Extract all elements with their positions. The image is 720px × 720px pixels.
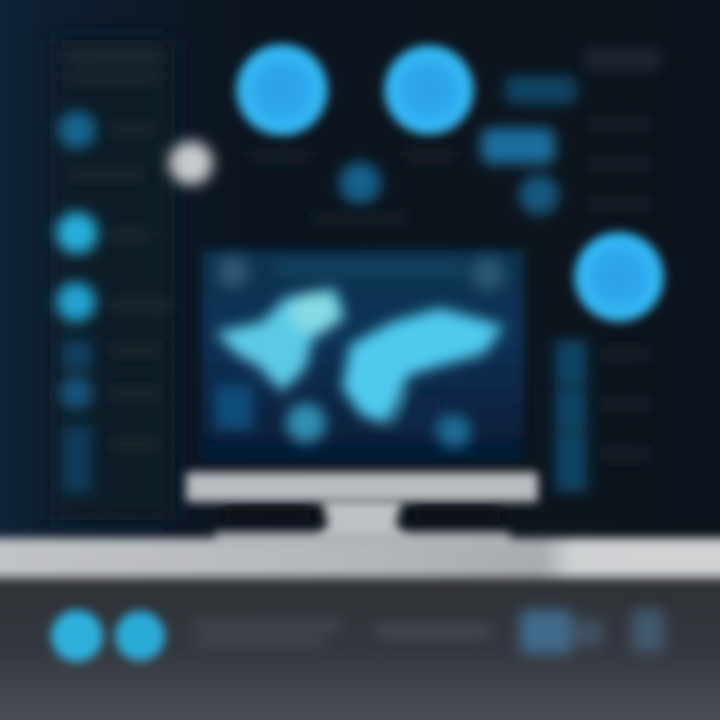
left panel bbox=[50, 40, 175, 520]
icon: dim bar one bbox=[62, 340, 92, 370]
map: light highlight bbox=[290, 292, 338, 332]
right column blue bars bbox=[555, 340, 587, 492]
icon: large blue orb right bbox=[574, 232, 664, 322]
world map bbox=[215, 288, 504, 448]
desk shelf bbox=[0, 532, 720, 578]
stand shadows bbox=[225, 508, 500, 522]
map: east landmass bbox=[342, 308, 504, 424]
map: small island bottom bbox=[286, 403, 326, 443]
bottom text placeholders bbox=[195, 620, 490, 646]
map: dim block left bbox=[215, 385, 253, 430]
monitor bezel bbox=[186, 472, 538, 502]
screen header items bbox=[217, 256, 505, 291]
bottom left icons bbox=[51, 610, 165, 662]
map: small island right bbox=[437, 414, 471, 448]
icon: small centre dot bbox=[339, 162, 381, 204]
icon: large blue orb left bbox=[236, 44, 328, 136]
right panel text placeholders bbox=[585, 48, 660, 458]
monitor screen bbox=[202, 250, 524, 462]
top right blue tags bbox=[481, 76, 577, 215]
icon: white dot bbox=[169, 141, 213, 185]
map: dim block centre bbox=[400, 395, 440, 430]
icon: cyan dot two bbox=[56, 282, 96, 322]
icon: large blue orb centre bbox=[384, 45, 474, 135]
icon: dim bar two bbox=[62, 425, 92, 493]
icon: cyan dot one bbox=[56, 212, 98, 254]
left column icons bbox=[56, 111, 98, 493]
orb captions bbox=[250, 150, 455, 223]
icon: top left dot bbox=[58, 111, 96, 149]
icon: bottom dot two bbox=[115, 611, 165, 661]
map: west landmass bbox=[216, 288, 345, 392]
icon: dim dot bbox=[59, 376, 93, 410]
left panel text placeholders bbox=[65, 50, 170, 448]
bottom right blue blocks bbox=[520, 610, 664, 654]
icon: bottom dot one bbox=[51, 610, 103, 662]
monitor stand bbox=[314, 500, 410, 545]
floor panel bbox=[0, 575, 720, 720]
monitor bbox=[186, 250, 538, 545]
